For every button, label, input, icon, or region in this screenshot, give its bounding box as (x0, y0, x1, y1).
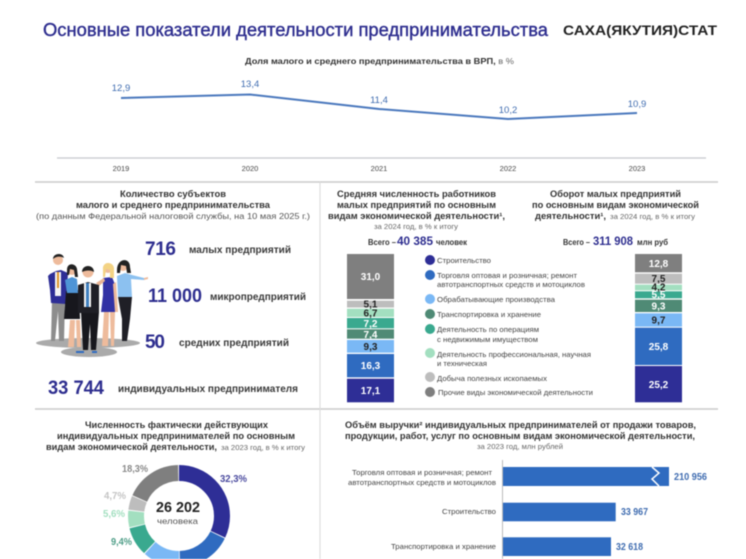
panel: average number of employees heading: за 2024 год, в % к итогу (374, 222, 458, 231)
stacked bar: turnover: 9,7 (652, 316, 666, 326)
legend: activity types: Добыча полезных ископаемых (437, 374, 547, 383)
title: Основные показатели деятельности предпринимательства (43, 20, 549, 40)
donut chart (103, 464, 247, 559)
panel: average number of employees heading: человек (436, 238, 468, 247)
stat: individual entrepreneurs (48, 378, 298, 399)
stat: small enterprises: малых предприятий (189, 244, 291, 256)
legend: activity types: Деятельность профессиональная, научная (437, 350, 591, 359)
stacked bar: employees: 5,1 (364, 300, 378, 310)
stacked bar: turnover: 7,5 (652, 274, 666, 285)
panel: average number of employees heading: Средняя численность работников (337, 189, 496, 199)
panel heading: (по данным Федеральной налоговой службы, на 10 мая 2025 г.) (36, 211, 310, 221)
donut chart: 26 202 (156, 500, 200, 516)
panel: individual entrepreneurs donut heading: видам экономической деятельности, (46, 442, 217, 452)
panel: individual entrepreneurs donut heading: за 2023 год, в % к итогу (221, 443, 305, 452)
line chart: share of small and medium business in GRP: 2020 (242, 164, 258, 173)
stat: medium enterprises: 50 (145, 332, 165, 353)
panel: revenue heading: продукции, работ, услуг по основным видам экономической деятельности, (345, 431, 695, 441)
panel: turnover of small enterprises heading: 311 908 (593, 236, 634, 248)
stacked bar: employees: 7,2 (364, 319, 378, 330)
panel: average number of employees heading (328, 189, 505, 248)
legend: activity types: и техническая (437, 359, 487, 368)
panel: revenue heading: Объём выручки² индивидуальных предпринимателей от продажи товаров, (345, 420, 696, 430)
legend: activity types: Транспортировка и хранение (437, 310, 541, 319)
donut chart: человека (157, 516, 198, 526)
panel: average number of employees heading: 40 385 (397, 236, 434, 248)
line chart: share of small and medium business in GRP: 11,4 (370, 95, 388, 106)
panel: turnover of small enterprises heading: Оборот малых предприятий (550, 189, 681, 199)
stacked bar: employees: 17,1 (361, 386, 381, 397)
panel heading (36, 189, 310, 221)
stacked bar: employees: 16,3 (361, 361, 381, 372)
bar chart: revenue: автотранспортных средств и мотоциклов (348, 478, 496, 487)
bar chart: revenue: Торговля оптовая и розничная; ремонт (352, 468, 493, 477)
icon: group of business people (36, 254, 148, 357)
stacked bar: turnover: 9,3 (652, 302, 666, 312)
legend: activity types: Прочие виды экономической деятельности (438, 388, 593, 397)
legend: activity types: с недвижимым имуществом (437, 335, 538, 344)
chart heading: Доля малого и среднего предпринимательства в ВРП, в % (245, 56, 514, 66)
stacked bar: turnover (635, 254, 682, 402)
bar chart: revenue: 210 956 (674, 472, 707, 483)
legend: activity types (425, 255, 593, 397)
panel: average number of employees heading: Всего – (368, 238, 397, 247)
panel: individual entrepreneurs donut heading (46, 420, 305, 452)
line chart: share of small and medium business in GRP: 13,4 (241, 79, 259, 90)
stat: micro enterprises: микропредприятий (210, 291, 306, 303)
donut chart: 9,4% (111, 537, 132, 548)
line chart: share of small and medium business in GRP: 10,2 (499, 105, 517, 116)
stacked bar: turnover: 12,8 (649, 259, 669, 270)
panel: turnover of small enterprises heading: по основным видам экономической (532, 200, 699, 210)
panel: turnover of small enterprises heading: за 2024 год, в % к итогу (610, 212, 695, 221)
panel heading: малого и среднего предпринимательства (76, 200, 271, 210)
panel: turnover of small enterprises heading: Всего – (563, 238, 590, 247)
donut chart: 5,6% (103, 509, 125, 520)
panel: turnover of small enterprises heading: млн руб (637, 238, 668, 247)
line chart: share of small and medium business in GRP: 2021 (371, 164, 387, 173)
panel heading: Количество субъектов (120, 189, 226, 199)
panel: revenue heading (345, 420, 696, 451)
bar chart: revenue (348, 460, 707, 559)
line chart: share of small and medium business in GRP (57, 56, 706, 173)
stat: medium enterprises (145, 332, 289, 353)
line chart: share of small and medium business in GRP: 2022 (500, 164, 516, 173)
bar chart: revenue: 32 618 (616, 542, 643, 553)
donut chart: 18,3% (122, 464, 148, 475)
stacked bar: employees: 9,3 (364, 342, 378, 353)
panel: revenue heading: за 2023 год, млн рублей (477, 442, 563, 451)
legend: activity types: автотранспортных средств и мотоциклов (437, 280, 585, 289)
stat: micro enterprises: 11 000 (148, 286, 202, 307)
stacked bar: turnover: 5,5 (652, 290, 666, 301)
line chart: share of small and medium business in GRP: 10,9 (628, 99, 646, 110)
panel: individual entrepreneurs donut heading: Численность фактически действующих (85, 420, 268, 430)
line chart: share of small and medium business in GRP: 2019 (113, 164, 129, 173)
bar chart: revenue: Строительство (442, 507, 496, 516)
donut chart: 32,3% (220, 474, 247, 485)
panel: average number of employees heading: видам экономической деятельности¹, (328, 211, 505, 221)
stacked bar: turnover: 4,2 (652, 282, 666, 294)
panel: number of businesses (36, 189, 310, 399)
stat: individual entrepreneurs: индивидуальных предпринимателя (118, 383, 298, 395)
stacked bar: employees: 31,0 (361, 272, 381, 283)
stat: medium enterprises: средних предприятий (179, 337, 289, 349)
stat: individual entrepreneurs: 33 744 (48, 378, 104, 399)
panel: average number of employees heading: малых предприятий по основным (337, 200, 496, 210)
stat: micro enterprises (148, 286, 306, 307)
donut chart: 4,7% (104, 491, 126, 502)
bar chart: revenue: 33 967 (621, 507, 648, 518)
stacked bar: turnover: 25,8 (649, 342, 669, 353)
stacked bar: employees (347, 254, 394, 402)
line chart: share of small and medium business in GRP: 2023 (629, 164, 645, 173)
stacked bar: turnover: 25,2 (649, 380, 669, 391)
legend: activity types: Деятельность по операциям (437, 325, 539, 334)
line chart: share of small and medium business in GRP: 12,9 (112, 83, 130, 94)
panel: turnover of small enterprises heading: деятельности¹, (535, 211, 606, 221)
bar chart: revenue: Транспортировка и хранение (391, 542, 496, 551)
logo text: САХА(ЯКУТИЯ)СТАТ (563, 22, 717, 38)
panel: turnover of small enterprises heading (532, 189, 699, 248)
stacked bar: employees: 6,7 (364, 308, 378, 320)
stat: small enterprises (145, 239, 291, 260)
legend: activity types: Обрабатывающие производства (437, 295, 556, 304)
stat: small enterprises: 716 (145, 239, 176, 260)
panel: individual entrepreneurs donut heading: индивидуальных предпринимателей по основным (57, 431, 295, 441)
legend: activity types: Строительство (437, 256, 491, 265)
stacked bar: employees: 7,4 (364, 330, 378, 341)
legend: activity types: Торговля оптовая и розничная; ремонт (437, 271, 578, 280)
